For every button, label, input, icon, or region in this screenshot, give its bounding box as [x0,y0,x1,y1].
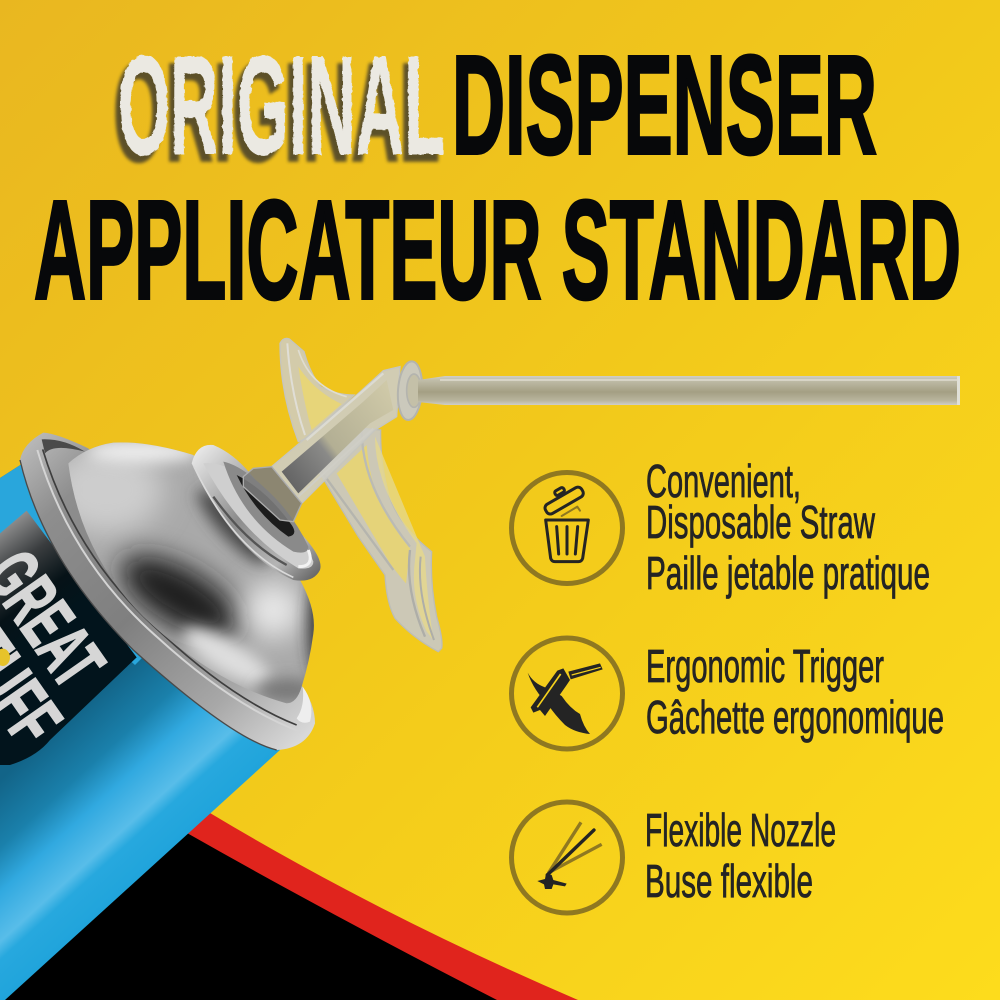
upper trigger wing [280,338,354,442]
title: ORIGINAL [118,26,445,184]
icon: bending nozzle [512,802,622,913]
title [34,26,961,328]
text: convenient disposable straw: Disposable Straw [646,496,875,548]
can label [0,511,137,765]
blue strip beside label [0,462,145,665]
feature: ergonomic trigger [512,638,944,749]
foam logo mark [0,649,10,666]
text: ergonomic trigger [646,640,944,743]
brand text [0,552,108,738]
feature: flexible nozzle [512,802,836,913]
text: convenient disposable straw [646,455,930,599]
nozzle base cup [243,467,302,522]
straw [418,376,960,405]
black corner [0,833,497,1000]
lower trigger [315,428,442,652]
text: flexible nozzle: Buse flexible [645,855,813,907]
lid rim [20,433,315,750]
red swoosh [165,813,578,1000]
title: ORIGINAL [113,33,440,191]
text: convenient disposable straw: Convenient, [646,455,801,507]
can body [0,462,280,1000]
neck flange [396,361,424,421]
nozzle tube [272,367,400,503]
dome [68,442,314,704]
valve collar [192,445,321,581]
feature: disposable straw [512,455,930,599]
text: flexible nozzle: Flexible Nozzle [645,804,836,856]
plastic dispenser [243,338,960,652]
text: flexible nozzle [645,804,836,907]
title word: ORIGINAL foam lettering [113,26,445,191]
icon: trash can [512,472,622,584]
spray can [0,433,335,1000]
icon: trigger [512,638,622,749]
